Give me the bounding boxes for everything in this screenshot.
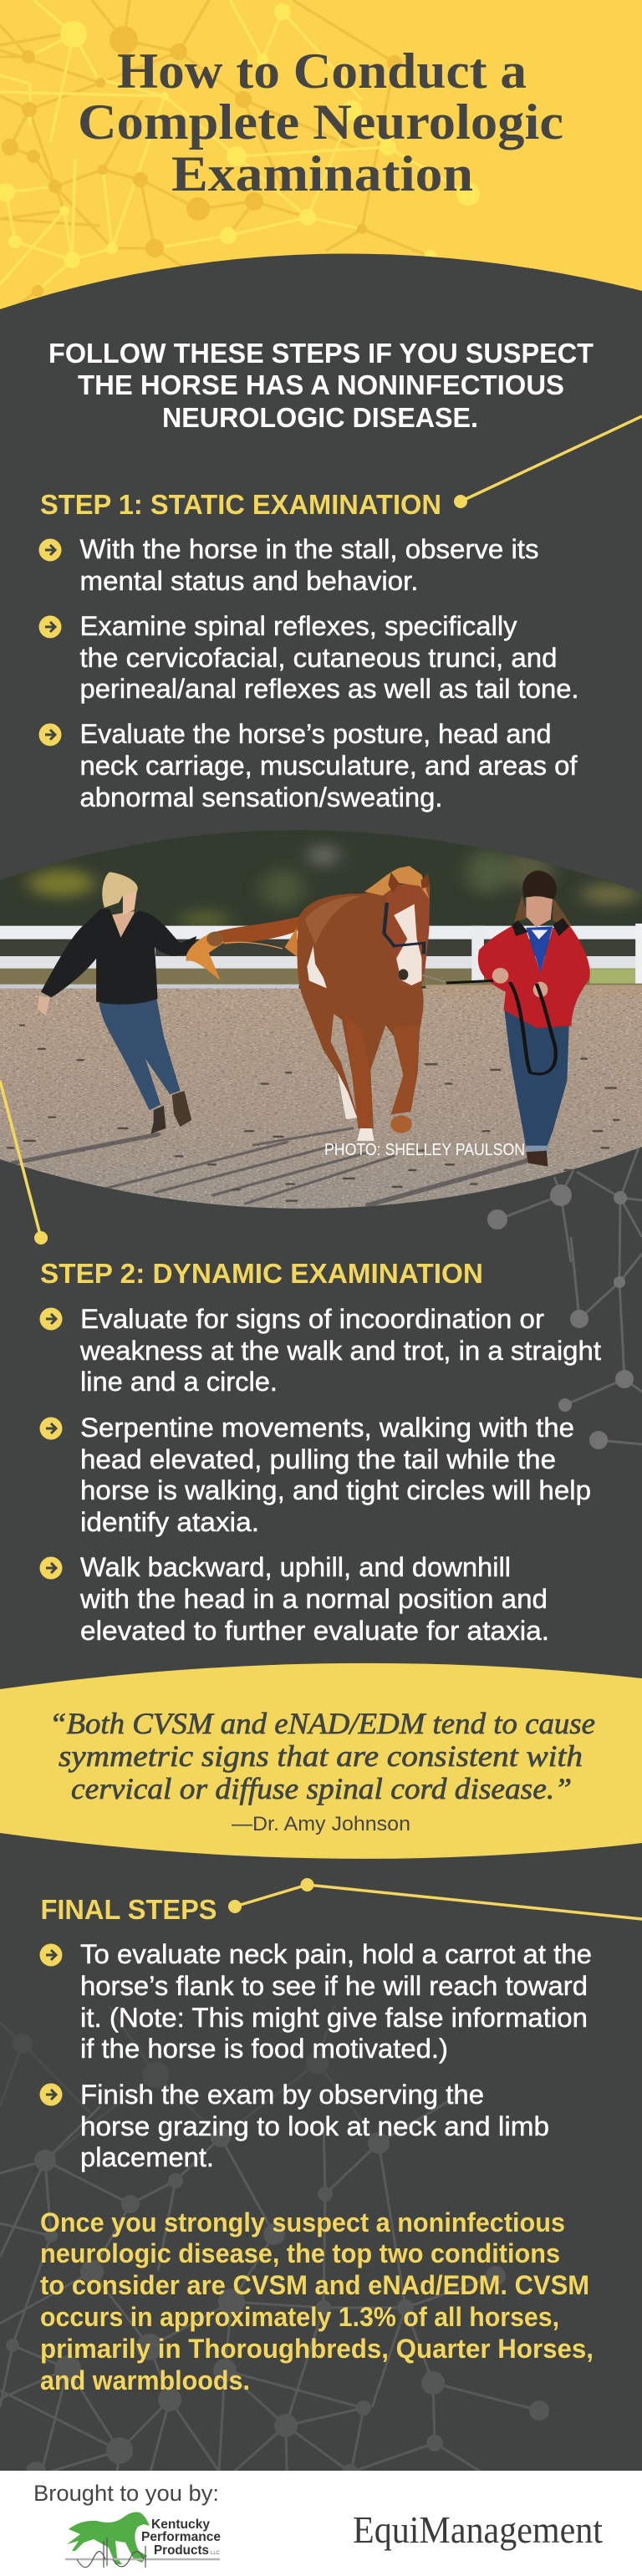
list: final steps bullets: [40, 1939, 592, 2172]
arena ground: [0, 985, 642, 1217]
bullet text: Walk backward, uphill, and downhill: [80, 1552, 511, 1582]
bullet text: Serpentine movements, walking with the: [80, 1413, 574, 1443]
lead rope: [446, 980, 556, 1074]
logo: Kentucky Performance Products: [65, 2512, 221, 2568]
shadows: [13, 1134, 158, 1163]
person: left handler: [38, 872, 196, 1134]
bullet text: mental status and behavior.: [80, 566, 419, 596]
quote attribution: —Dr. Amy Johnson: [232, 1813, 410, 1835]
bullet text: horse grazing to look at neck and limb: [80, 2111, 549, 2141]
bullet text: elevated to further evaluate for ataxia.: [80, 1616, 549, 1646]
icon: arrow bullet: [40, 1307, 62, 1331]
bullet text: identify ataxia.: [80, 1507, 259, 1537]
bullet text: line and a circle.: [80, 1367, 278, 1397]
closing paragraph: [40, 2207, 594, 2395]
subheading: THE HORSE HAS A NONINFECTIOUS: [78, 369, 564, 400]
quote text: cervical or diffuse spinal cord disease.”: [71, 1772, 572, 1805]
neuron network pattern: bottom: [0, 2006, 549, 2482]
panel: sponsor footer: [0, 2471, 642, 2576]
bullet text: if the horse is food motivated.): [80, 2034, 448, 2064]
icon: arrow bullet: [38, 615, 62, 639]
horse: [298, 866, 446, 1141]
bullet text: [80, 611, 578, 704]
panel: yellow header: [0, 0, 642, 318]
quote text: [49, 1707, 595, 1805]
bullet text: head elevated, pulling the tail while the: [80, 1444, 556, 1474]
closing paragraph: and warmbloods.: [40, 2365, 250, 2395]
panel: quote band: [0, 1663, 642, 1859]
list: step 2 bullets: [40, 1304, 601, 1646]
connector line: final steps: [228, 1878, 642, 1919]
heading: step 2: STEP 2: DYNAMIC EXAMINATION: [40, 1258, 483, 1289]
bullet text: [80, 719, 578, 812]
sponsor label: Brought to you by:: [33, 2481, 219, 2506]
icon: arrow bullet: [40, 1944, 62, 1966]
panel: dark content arc: [0, 253, 642, 351]
photo credit: PHOTO: SHELLEY PAULSON: [324, 1141, 525, 1159]
bullet text: weakness at the walk and trot, in a straight: [79, 1336, 601, 1366]
title: How to Conduct a: [117, 43, 527, 99]
heading: final steps: FINAL STEPS: [40, 1894, 217, 1925]
title: Complete Neurologic: [78, 94, 563, 150]
bullet text: horse is walking, and tight circles will help: [80, 1475, 591, 1505]
connector line: step 1: [454, 416, 642, 508]
subheading: FOLLOW THESE STEPS IF YOU SUSPECT: [48, 338, 594, 369]
icon: arrow bullet: [40, 2083, 62, 2106]
icon: arrow bullet: [40, 1556, 62, 1580]
logo: Kentucky Performance Products: Performance: [141, 2530, 221, 2544]
bullet text: With the horse in the stall, observe its: [80, 534, 538, 564]
logo: EquiManagement: EquiManagement: [353, 2508, 603, 2551]
bullet text: abnormal sensation/sweating.: [80, 782, 443, 812]
bullet text: placement.: [80, 2142, 214, 2172]
closing paragraph: Once you strongly suspect a noninfectious: [40, 2207, 565, 2237]
icon: arrow bullet: [38, 538, 62, 562]
bullet text: [80, 1939, 592, 2064]
horse tail: [186, 916, 301, 980]
neuron network pattern: header: [0, 0, 480, 318]
bullet text: horse’s flank to see if he will reach toward: [80, 1971, 588, 2001]
bullet text: [79, 1304, 601, 1397]
bullet text: perineal/anal reflexes as well as tail tone.: [80, 674, 578, 704]
subheading: NEUROLOGIC DISEASE.: [162, 402, 478, 433]
bullet text: Evaluate the horse’s posture, head and: [80, 719, 552, 749]
bullet text: neck carriage, musculature, and areas of: [80, 751, 578, 781]
tree background: [0, 827, 642, 989]
heading: step 1: STEP 1: STATIC EXAMINATION: [40, 489, 441, 520]
logo: Kentucky Performance Products: LLC: [211, 2551, 221, 2556]
title: Examination: [171, 146, 473, 201]
neuron network pattern: right side: [487, 1148, 642, 1449]
closing paragraph: neurologic disease, the top two conditions: [40, 2238, 560, 2268]
bullet text: with the head in a normal position and: [79, 1584, 548, 1614]
photo: horse exam in arena: [0, 827, 642, 1217]
bullet text: Evaluate for signs of incoordination or: [80, 1304, 544, 1334]
bullet text: To evaluate neck pain, hold a carrot at the: [80, 1939, 592, 1969]
logo: Kentucky Performance Products: Products: [154, 2543, 209, 2558]
bullet text: [80, 2080, 549, 2172]
bullet text: [80, 1413, 591, 1537]
title: [78, 43, 563, 201]
quote text: symmetric signs that are consistent with: [59, 1739, 583, 1773]
bullet text: the cervicofacial, cutaneous trunci, and: [80, 643, 558, 673]
closing paragraph: to consider are CVSM and eNAd/EDM. CVSM: [40, 2270, 589, 2300]
bullet text: [80, 534, 538, 596]
bullet text: Examine spinal reflexes, specifically: [80, 611, 517, 641]
list: step 1 bullets: [38, 534, 578, 812]
icon: arrow bullet: [40, 1418, 62, 1439]
logo: Kentucky Performance Products: Kentucky: [151, 2517, 210, 2532]
closing paragraph: primarily in Thoroughbreds, Quarter Horses,: [40, 2334, 594, 2364]
subheading: [48, 338, 594, 433]
bullet text: Finish the exam by observing the: [80, 2080, 484, 2110]
bullet text: it. (Note: This might give false information: [80, 2003, 588, 2033]
closing paragraph: occurs in approximately 1.3% of all horses,: [40, 2302, 559, 2332]
fence: [0, 924, 642, 991]
bullet text: [79, 1552, 549, 1646]
person: right handler: [478, 870, 590, 1167]
icon: arrow bullet: [38, 724, 62, 746]
quote text: “Both CVSM and eNAD/EDM tend to cause: [49, 1707, 595, 1740]
connector line: step 2: [0, 1081, 48, 1245]
